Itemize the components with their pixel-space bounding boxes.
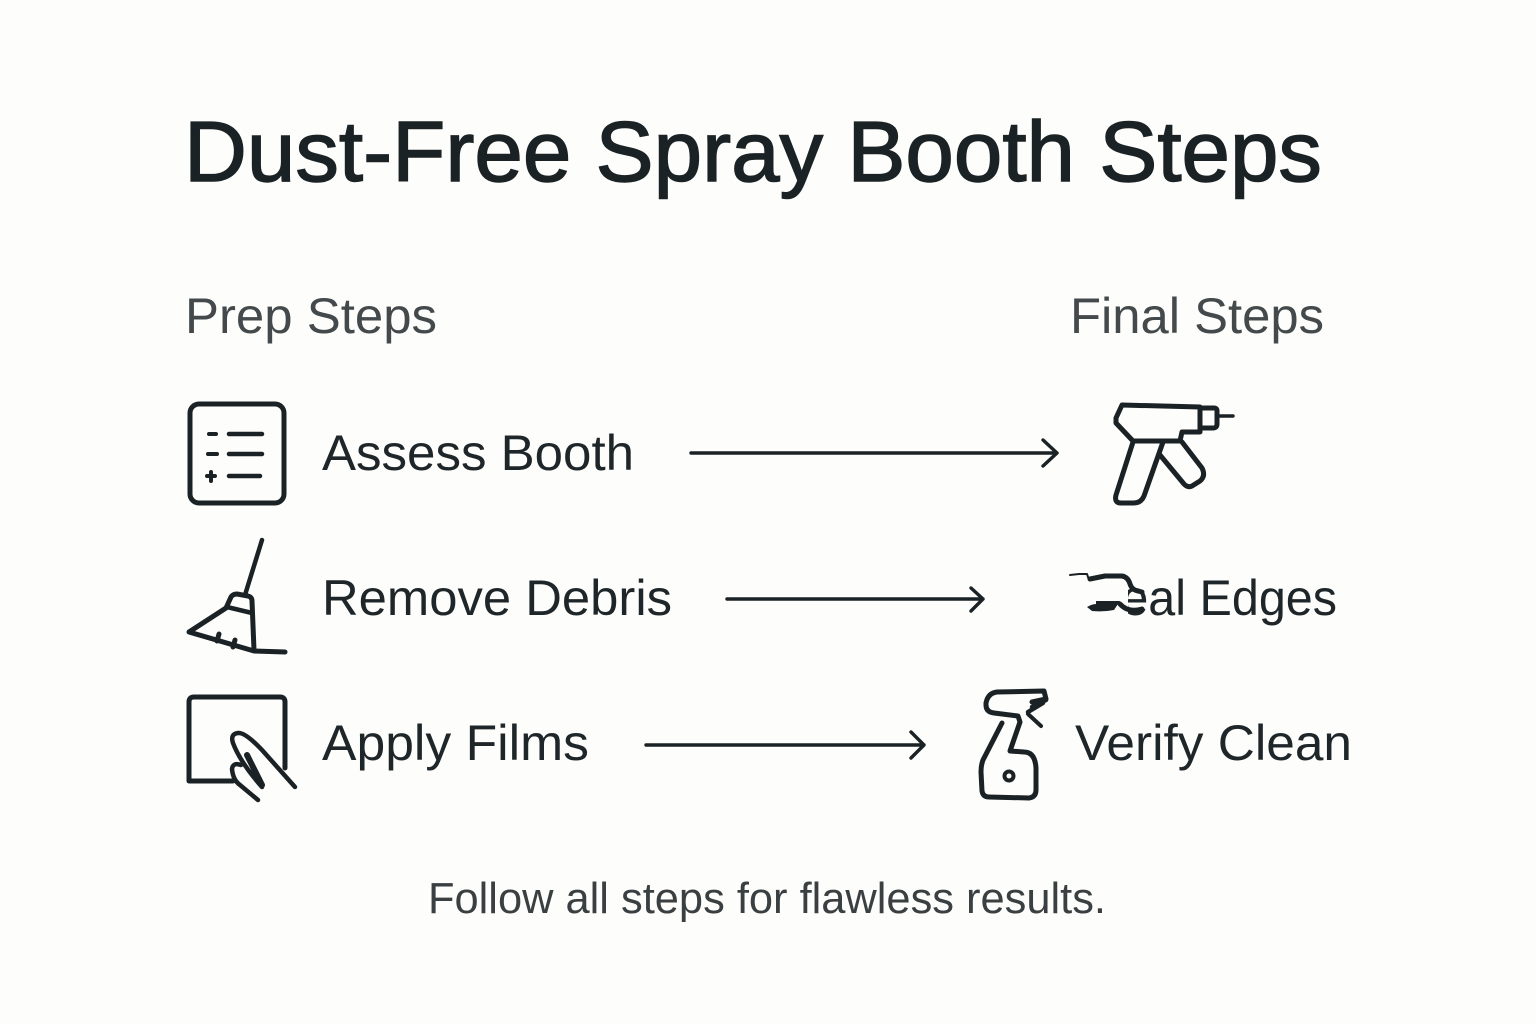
- heading: final steps: Final Steps: [1070, 288, 1324, 344]
- label: seal edges: Seal Edges: [1089, 570, 1337, 626]
- arrow: apply films to verify clean: [646, 732, 924, 758]
- icon: spray bottle: [981, 691, 1046, 798]
- label: remove debris: Remove Debris: [322, 570, 672, 626]
- icon: checklist: [190, 404, 284, 503]
- arrow: assess booth to spray gun: [691, 440, 1057, 466]
- heading: prep steps: Prep Steps: [185, 288, 437, 344]
- icon: spray gun: [1116, 405, 1233, 503]
- label: assess booth: Assess Booth: [322, 425, 634, 481]
- arrow: remove debris to seal edges: [727, 588, 983, 611]
- title: Dust-Free Spray Booth Steps: [184, 105, 1322, 200]
- label: verify clean: Verify Clean: [1075, 715, 1352, 771]
- icon: film and hand: [189, 697, 295, 800]
- label: apply films: Apply Films: [322, 715, 589, 771]
- icon: broom: [189, 540, 285, 652]
- footer note: Follow all steps for flawless results.: [428, 874, 1106, 923]
- icon: sealing tool: [1070, 570, 1142, 618]
